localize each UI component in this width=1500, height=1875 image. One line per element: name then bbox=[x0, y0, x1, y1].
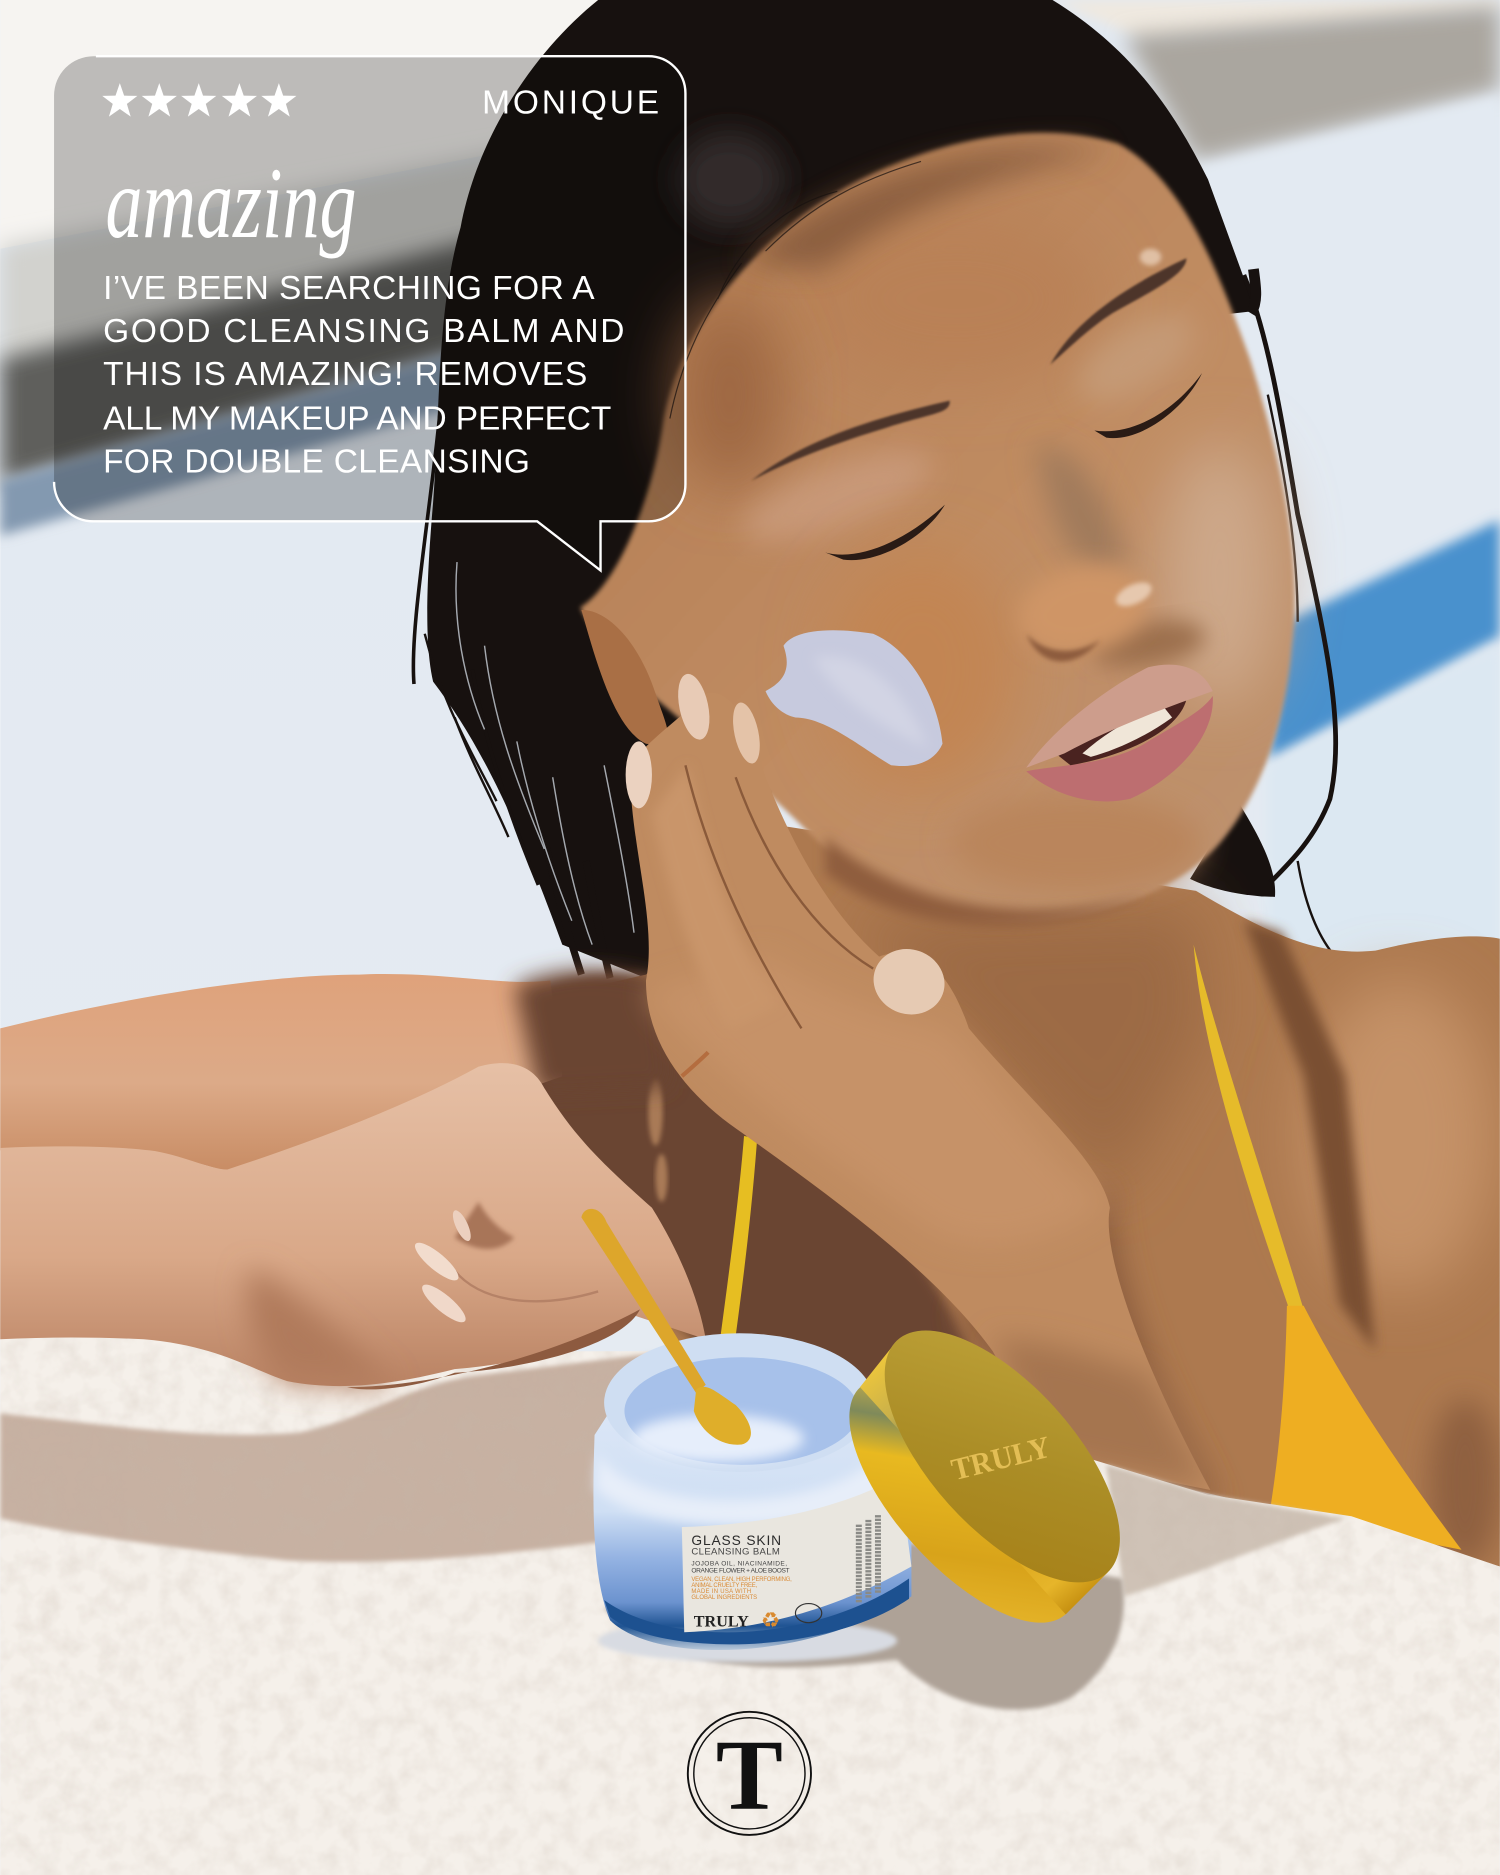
upper lip shadow bbox=[1088, 614, 1208, 673]
yellow bikini bbox=[720, 945, 1461, 1550]
jar label: ♻ bbox=[761, 1608, 780, 1633]
ring bbox=[682, 1052, 708, 1076]
forehead glow bbox=[813, 215, 1100, 383]
chest mid tone bbox=[957, 1184, 1220, 1507]
jar label: ANIMAL CRUELTY FREE, bbox=[691, 1583, 758, 1589]
jaw shade bbox=[825, 837, 1148, 925]
back of hand shading bbox=[646, 957, 1106, 1244]
hairline strands bbox=[670, 161, 921, 419]
fingernails fist bbox=[410, 1237, 463, 1286]
jar inner bbox=[624, 1357, 859, 1465]
hair back mass bbox=[427, 0, 1275, 981]
Truly T logo bbox=[688, 1712, 811, 1835]
right brow bbox=[1050, 258, 1186, 365]
review headline: amazing bbox=[105, 146, 357, 259]
balm surface glow bbox=[632, 1415, 804, 1462]
review body: THIS IS AMAZING! REMOVES bbox=[103, 356, 587, 393]
review body bbox=[103, 270, 624, 480]
chin bbox=[951, 795, 1202, 891]
teeth bbox=[1082, 706, 1172, 757]
review body: FOR DOUBLE CLEANSING bbox=[103, 443, 530, 480]
left pool edge blue bbox=[0, 293, 670, 536]
right water bbox=[1196, 96, 1500, 646]
gold spoon bbox=[581, 1209, 751, 1445]
jar label: TRULY bbox=[694, 1613, 749, 1630]
nose tip highlight bbox=[1112, 578, 1155, 611]
lid rim side bbox=[860, 1340, 1108, 1614]
balm light bbox=[813, 656, 927, 747]
review body: GOOD CLEANSING BALM AND bbox=[103, 313, 624, 350]
left cheek orange bbox=[825, 550, 1017, 789]
jar label: CLEANSING BALM bbox=[691, 1547, 780, 1558]
bikini triangle bbox=[1270, 1306, 1461, 1550]
right eyelash bbox=[1094, 373, 1202, 438]
left ledge gray bbox=[0, 120, 670, 371]
right shoulder stripes bbox=[1244, 921, 1375, 1351]
balm swatch on cheek bbox=[766, 630, 943, 766]
hairline shade bbox=[742, 146, 1112, 269]
nose bbox=[1009, 554, 1156, 666]
finger light bbox=[652, 765, 778, 1028]
gold lid bbox=[812, 1292, 1160, 1658]
jar label: ORANGE FLOWER + ALOE BOOST bbox=[691, 1567, 789, 1574]
left ledge dark band bbox=[0, 191, 670, 484]
jar neck band bbox=[596, 1453, 885, 1525]
fist shadow bbox=[347, 1309, 640, 1389]
jar cast shadow ring bbox=[598, 1619, 897, 1662]
jar label: MADE IN USA WITH bbox=[691, 1589, 751, 1595]
gaps in the hair bbox=[456, 562, 634, 945]
lid rim underside bbox=[812, 1343, 1114, 1658]
eyelid right light bbox=[1064, 298, 1208, 420]
left wall white bbox=[0, 0, 670, 249]
jar label bbox=[682, 1477, 911, 1633]
left eyelash bbox=[825, 505, 945, 560]
right ledge band bbox=[1124, 6, 1500, 161]
fist fold bbox=[455, 1202, 514, 1249]
right cheek light bbox=[1163, 442, 1277, 706]
hair top sheen bbox=[676, 132, 783, 227]
jar label: GLOBAL INGREDIENTS bbox=[691, 1595, 757, 1601]
reviewer name: MONIQUE bbox=[482, 85, 659, 122]
forearm shadow bbox=[993, 1339, 1210, 1490]
face bbox=[580, 133, 1295, 925]
stone shadow left bbox=[0, 1351, 670, 1562]
ear bbox=[581, 610, 668, 744]
finger gaps bbox=[685, 765, 801, 1028]
right wall beige bbox=[1053, 0, 1500, 42]
review body: ALL MY MAKEUP AND PERFECT bbox=[103, 400, 611, 437]
brow sun spot bbox=[1140, 249, 1161, 265]
five stars bbox=[102, 83, 296, 117]
jar glass rim bbox=[604, 1333, 874, 1472]
review speech bubble bbox=[54, 56, 685, 570]
nostril bbox=[1026, 634, 1100, 661]
left temple dark bbox=[676, 299, 783, 490]
lid brand: TRULY bbox=[948, 1429, 1054, 1487]
jar blue base bbox=[604, 1578, 909, 1644]
jar body bbox=[593, 1411, 911, 1650]
pool blue stripe bbox=[1268, 520, 1500, 759]
stone shadow right bbox=[1106, 1465, 1346, 1596]
sun dapples bbox=[648, 1079, 663, 1146]
left strap bbox=[720, 1136, 757, 1345]
jar label: GLASS SKIN bbox=[691, 1533, 781, 1548]
upper left arm bbox=[0, 974, 562, 1172]
jar label: JOJOBA OIL, NIACINAMIDE, bbox=[691, 1560, 787, 1567]
eyelid left light bbox=[731, 432, 943, 560]
bubble shape bbox=[54, 56, 685, 570]
Truly T logo: T bbox=[716, 1719, 783, 1831]
jar label: VEGAN, CLEAN, HIGH PERFORMING, bbox=[691, 1577, 792, 1583]
left brow bbox=[751, 401, 950, 481]
hand on face bbox=[626, 671, 1210, 1490]
review body: I’VE BEEN SEARCHING FOR A bbox=[103, 270, 595, 307]
right chest light bbox=[1304, 981, 1495, 1291]
shoulder and chest bbox=[508, 825, 1500, 1566]
lips bbox=[1026, 665, 1213, 801]
arm shadow from hair bbox=[514, 970, 670, 1094]
nails bbox=[626, 741, 652, 808]
jar and lid cast shadow bbox=[604, 1543, 1124, 1710]
chest shadow bbox=[508, 976, 993, 1411]
nose side shadow bbox=[1035, 446, 1130, 571]
stone ledge bbox=[0, 1315, 1500, 1875]
lid face bbox=[844, 1292, 1160, 1621]
lower forearm and fist bbox=[0, 1063, 706, 1389]
jar bbox=[593, 1333, 911, 1650]
right strap bbox=[1194, 945, 1304, 1309]
neck shade bbox=[849, 909, 1208, 1196]
hair clump right of jaw bbox=[1190, 801, 1275, 897]
stone texture bbox=[0, 1315, 1500, 1875]
hair strands around bbox=[413, 269, 1342, 978]
